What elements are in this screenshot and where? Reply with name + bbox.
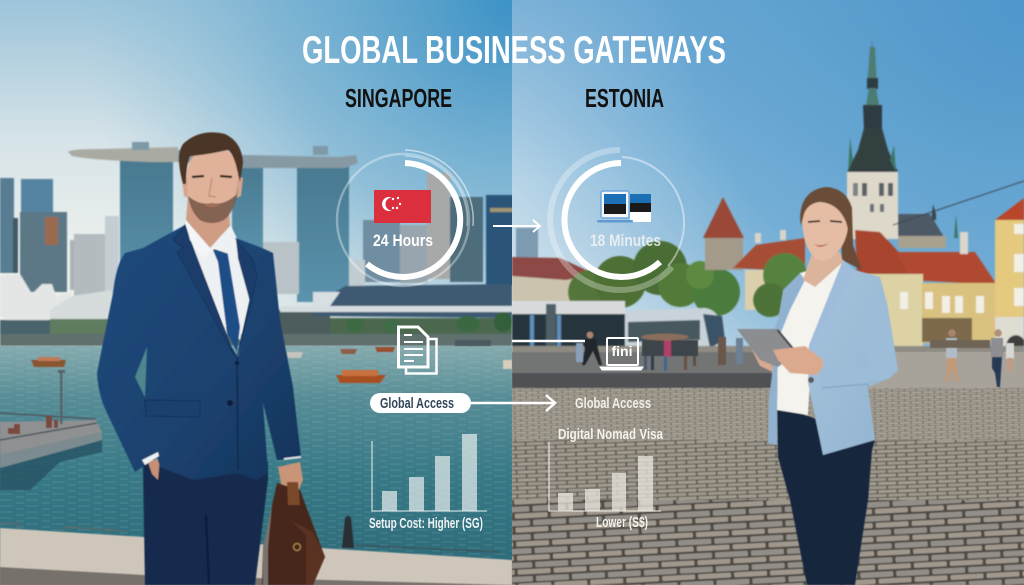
connector line: documents to laptop [512,340,585,342]
label: Global Access (Estonia): Global Access [575,395,651,412]
water gap beside arm [135,347,147,397]
old town skyline [512,38,1024,355]
water: bay [0,346,512,561]
label: Digital Nomad Visa: Digital Nomad Visa [558,426,664,443]
heading: Estonia: ESTONIA [585,83,664,113]
icon: laptop with Estonia flag [597,191,651,222]
face [187,148,238,223]
blazer body [808,260,898,455]
left lapel [173,225,235,357]
trousers [143,462,268,585]
ponytail [840,210,862,270]
panel: Estonia background scene [512,0,1024,585]
pill: Global Access (Singapore) [370,393,471,413]
arrow: Singapore to Estonia time [493,220,540,232]
right hand [773,346,823,375]
heading: Singapore: SINGAPORE [345,83,452,113]
trousers [777,405,875,585]
bar chart: Singapore setup cost [372,434,487,511]
right hand [278,462,303,494]
progress ring: Singapore 24 hours [337,150,473,286]
icon: laptop [600,338,643,370]
tablet [737,329,798,367]
town square cobblestones [512,352,1024,585]
pier [0,370,102,490]
label: 18 Minutes: 18 Minutes [590,231,661,250]
icon: Singapore flag [374,190,431,223]
jacket [97,225,301,480]
briefcase [262,483,325,585]
title: GLOBAL BUSINESS GATEWAYS [302,29,726,72]
arrow: global access [471,395,555,411]
progress ring: Estonia 18 minutes [550,150,684,290]
left hand [752,350,773,372]
figure: Singapore businessman [97,132,325,585]
icon: documents [398,327,436,374]
figure: Estonia businesswoman [737,187,898,585]
right lapel [232,235,257,357]
skyline and Marina Bay Sands [0,142,518,346]
people in the square [576,329,1014,387]
blazer left panel [768,273,805,445]
tie [213,243,240,352]
neck [186,196,230,248]
promenade [0,516,512,585]
face [802,200,848,260]
sky: Estonia [512,0,1024,360]
label: Lower: Lower (S$) [596,514,648,531]
left hand [148,458,160,480]
neck [803,250,843,287]
sky: Singapore [0,0,512,350]
label: 24 Hours: 24 Hours [373,231,433,250]
label: Setup Cost Higher: Setup Cost: Higher (SG) [369,515,483,532]
bar chart: Estonia setup cost [549,442,661,511]
pill: Global Access (Singapore): Global Access [380,395,454,412]
hair [800,187,852,240]
icon: laptop: fini [612,343,632,359]
panel: Singapore background scene [0,0,518,585]
hair [179,132,243,184]
shirt [185,220,250,340]
boats [31,340,512,383]
shirt [777,260,843,415]
